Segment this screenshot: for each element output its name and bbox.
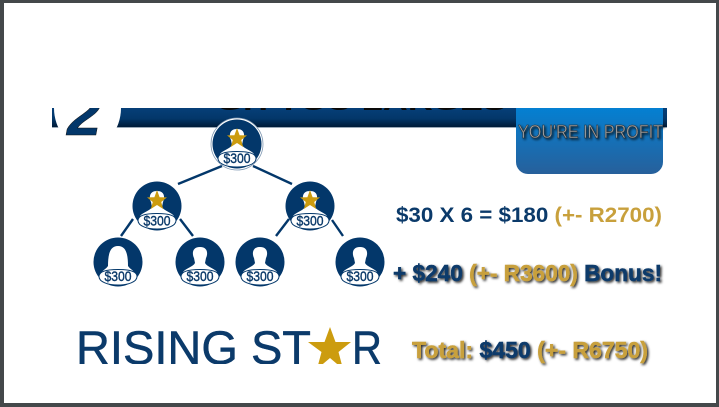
star (147, 190, 167, 209)
amount: $300 (104, 268, 132, 284)
amount: $300 (186, 268, 214, 284)
callout text: YOU'RE IN PROFIT (518, 122, 663, 142)
amount: $300 (224, 150, 251, 166)
banner (52, 108, 667, 128)
step number badge (54, 108, 121, 136)
node: bottom member 3 (236, 238, 284, 286)
node: bottom member 2 (176, 238, 224, 286)
amount: $300 (296, 212, 324, 228)
node: left star member (132, 182, 182, 230)
node: bottom member 4 (336, 238, 384, 286)
logo last letter: R (352, 321, 382, 374)
amount: $300 (144, 212, 171, 228)
banner heading, clipped: GH YOU LARGES (216, 90, 506, 115)
step number badge: 2 (66, 80, 101, 149)
amount: $300 (346, 268, 374, 284)
rising star logo (80, 327, 380, 364)
profit callout (516, 108, 663, 174)
node: top star member (211, 118, 263, 170)
star (300, 190, 320, 209)
commission line: $30 X 6 = $180 (+- R2700) (396, 203, 662, 227)
bonus line: + $240 (+- R3600) Bonus! (393, 260, 662, 286)
tree connector lines (121, 166, 343, 236)
rising star logo: RISING ST (76, 321, 311, 374)
node: bottom member 1 (94, 238, 142, 286)
logo star (308, 327, 351, 364)
total line: Total: $450 (+- R6750) (412, 337, 648, 363)
amount: $300 (246, 268, 274, 284)
star (227, 128, 247, 147)
node: right star member (286, 182, 334, 230)
